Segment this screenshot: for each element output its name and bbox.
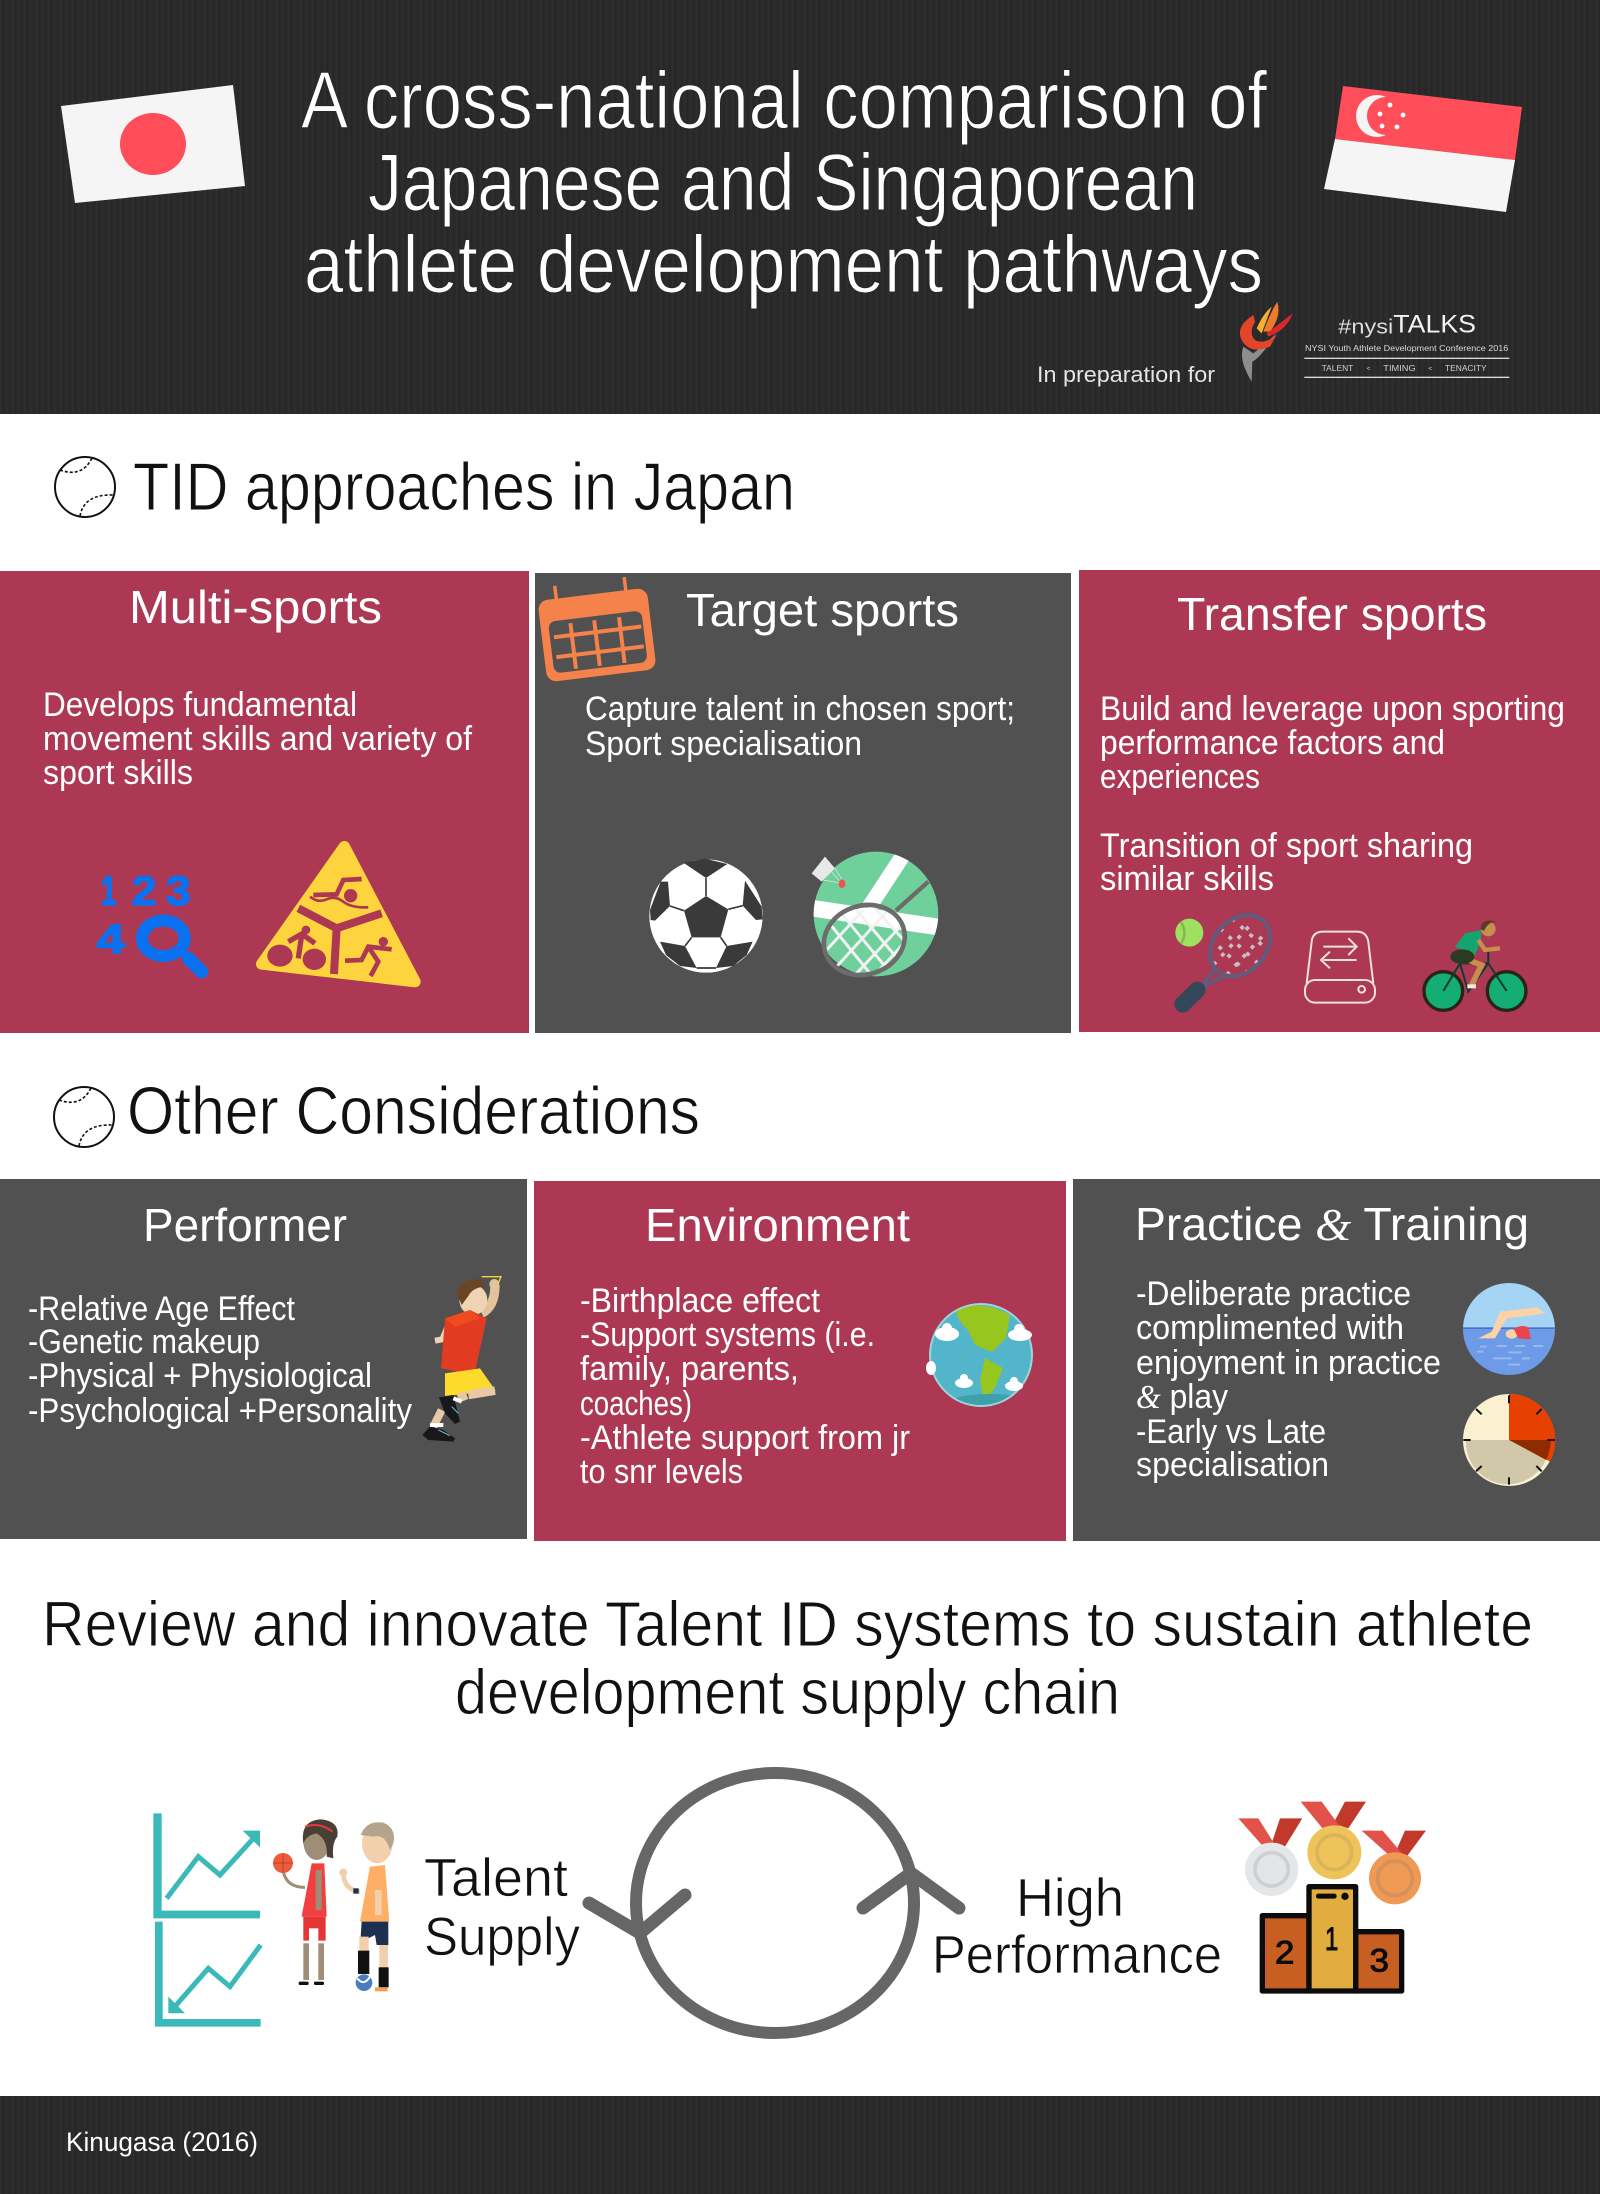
heading: review and innovate xyxy=(42,1588,1533,1728)
text: environment factors: to snr levels xyxy=(580,1453,743,1491)
heading: multi-sports: Multi-sports xyxy=(129,581,382,633)
text: transfer sports description xyxy=(1100,690,1565,898)
header banner xyxy=(0,0,1600,414)
text: in preparation for: In preparation for xyxy=(1037,362,1215,387)
text: performer factors: -Physical + Physiological xyxy=(28,1357,372,1395)
panel: environment xyxy=(534,1181,1066,1541)
text: talent supply xyxy=(424,1848,580,1967)
icon: numbers and magnifier: 1 xyxy=(101,867,117,914)
diagram: cycle arrows xyxy=(589,1773,959,2033)
text: practice factors xyxy=(1136,1275,1441,1484)
text: high performance: High xyxy=(1016,1868,1124,1928)
text: target sports description xyxy=(585,690,1015,763)
panel: target sports xyxy=(535,573,1071,1033)
icon: numbers and magnifier: 2 xyxy=(132,867,157,914)
icon: medals and podium: 2 xyxy=(1275,1934,1294,1970)
icon: football xyxy=(649,859,763,973)
logo: nysiTALKS conference xyxy=(1240,302,1509,382)
icon: growth charts xyxy=(153,1813,261,2027)
text: practice factors: -Deliberate practice xyxy=(1136,1275,1411,1313)
title: athlete development pathways xyxy=(304,220,1263,310)
heading: TID approaches in Japan: TID approaches in Japan xyxy=(133,449,795,525)
icon: clock xyxy=(1463,1394,1555,1486)
text: environment factors: -Birthplace effect xyxy=(580,1282,821,1320)
heading: target sports: Target sports xyxy=(686,584,959,636)
logo: nysiTALKS conference: < xyxy=(1367,366,1371,373)
heading: other considerations: Other Considerations xyxy=(127,1073,700,1149)
title: Japanese and Singaporean xyxy=(368,138,1198,228)
heading: performer: Performer xyxy=(143,1199,347,1251)
text: performer factors: -Psychological +Personality xyxy=(28,1392,412,1430)
icon: globe xyxy=(926,1303,1033,1410)
text: citation: Kinugasa (2016) xyxy=(66,2127,258,2157)
logo: nysiTALKS conference: TALENT xyxy=(1322,364,1353,373)
logo: nysiTALKS conference: < xyxy=(1428,366,1432,373)
icon: medals and podium xyxy=(1238,1802,1426,1991)
icon: tennis racket and ball xyxy=(1175,903,1282,1004)
icon: baseball xyxy=(55,457,115,517)
text: multi-sports description: sport skills xyxy=(43,754,193,792)
heading: environment: Environment xyxy=(645,1199,910,1251)
icon: cyclist xyxy=(1424,921,1526,1010)
text: multi-sports description: movement skills and variety of xyxy=(43,720,473,758)
icon: numbers and magnifier: 3 xyxy=(166,867,191,914)
text: multi-sports description: Develops fundamental xyxy=(43,686,357,724)
icon: swimmer xyxy=(1463,1283,1555,1375)
heading: transfer sports: Transfer sports xyxy=(1177,588,1487,640)
text: transfer sports description: Transition of sport sharing xyxy=(1100,827,1473,865)
text: high performance xyxy=(932,1868,1222,1985)
icon: numbers and magnifier xyxy=(97,867,202,972)
text: practice factors: & play xyxy=(1136,1378,1228,1416)
text: environment factors: -Athlete support from jr xyxy=(580,1419,910,1457)
logo: nysiTALKS conference: #nysi xyxy=(1338,315,1393,338)
text: transfer sports description: similar skills xyxy=(1100,860,1274,898)
boy with football xyxy=(339,1822,394,1991)
podium xyxy=(1262,1887,1402,1991)
girl with basketball xyxy=(273,1819,338,1985)
icon: badminton xyxy=(812,852,940,985)
panel: multi-sports xyxy=(0,571,529,1033)
title xyxy=(301,56,1267,310)
text: transfer sports description: experiences xyxy=(1100,758,1260,796)
medals xyxy=(1238,1802,1426,1904)
panel: transfer sports xyxy=(1079,570,1600,1032)
icon: young athletes xyxy=(273,1819,394,1991)
arrow: right upward head xyxy=(863,1873,959,1908)
panel: performer xyxy=(0,1179,527,1539)
icon: numbers and magnifier: 4 xyxy=(97,915,125,962)
text: talent supply: Talent xyxy=(424,1848,568,1908)
heading: practice and training: Practice & Training xyxy=(1135,1198,1529,1250)
text: environment factors: coaches) xyxy=(580,1385,692,1423)
icon: triathlon sign xyxy=(262,847,415,982)
title: A cross-national comparison of xyxy=(301,56,1267,146)
logo: nysiTALKS conference: TALKS xyxy=(1393,312,1476,339)
arrow: left downward head xyxy=(589,1895,685,1933)
text: practice factors: specialisation xyxy=(1136,1446,1329,1484)
text: environment factors xyxy=(580,1282,910,1491)
panel: practice and training xyxy=(1073,1179,1600,1541)
icon: baseball xyxy=(54,1087,114,1147)
text: performer factors xyxy=(28,1290,412,1430)
text: environment factors: family, parents, xyxy=(580,1350,799,1388)
icon: transfer drive xyxy=(1305,932,1375,1003)
heading: review and innovate: development supply chain xyxy=(455,1656,1120,1728)
text: practice factors: -Early vs Late xyxy=(1136,1413,1326,1451)
text: performer factors: -Genetic makeup xyxy=(28,1323,260,1361)
icon: calendar xyxy=(536,575,657,682)
text: multi-sports description xyxy=(43,686,473,792)
text: practice factors: enjoyment in practice xyxy=(1136,1344,1441,1382)
logo: nysiTALKS conference: NYSI Youth Athlete Development Conference 2016 xyxy=(1305,343,1509,353)
icon: handball athlete xyxy=(422,1277,501,1442)
icon: Singaporean flag xyxy=(1324,86,1522,212)
text: high performance: Performance xyxy=(932,1925,1222,1985)
icon: medals and podium: 3 xyxy=(1370,1943,1389,1979)
logo: nysiTALKS conference: TENACITY xyxy=(1445,364,1487,373)
text: target sports description: Sport specialisation xyxy=(585,725,862,763)
icon: medals and podium: 1 xyxy=(1325,1921,1338,1957)
text: performer factors: -Relative Age Effect xyxy=(28,1290,295,1328)
text: transfer sports description: Build and leverage upon sporting xyxy=(1100,690,1565,728)
logo: nysiTALKS conference: TIMING xyxy=(1383,364,1416,373)
text: target sports description: Capture talent in chosen sport; xyxy=(585,690,1015,728)
text: practice factors: complimented with xyxy=(1136,1309,1404,1347)
icon: Japanese flag xyxy=(61,85,245,203)
text: talent supply: Supply xyxy=(424,1907,580,1967)
text: environment factors: -Support systems (i.e. xyxy=(580,1316,875,1354)
text: transfer sports description: performance factors and xyxy=(1100,724,1445,762)
footer xyxy=(0,2096,1600,2194)
